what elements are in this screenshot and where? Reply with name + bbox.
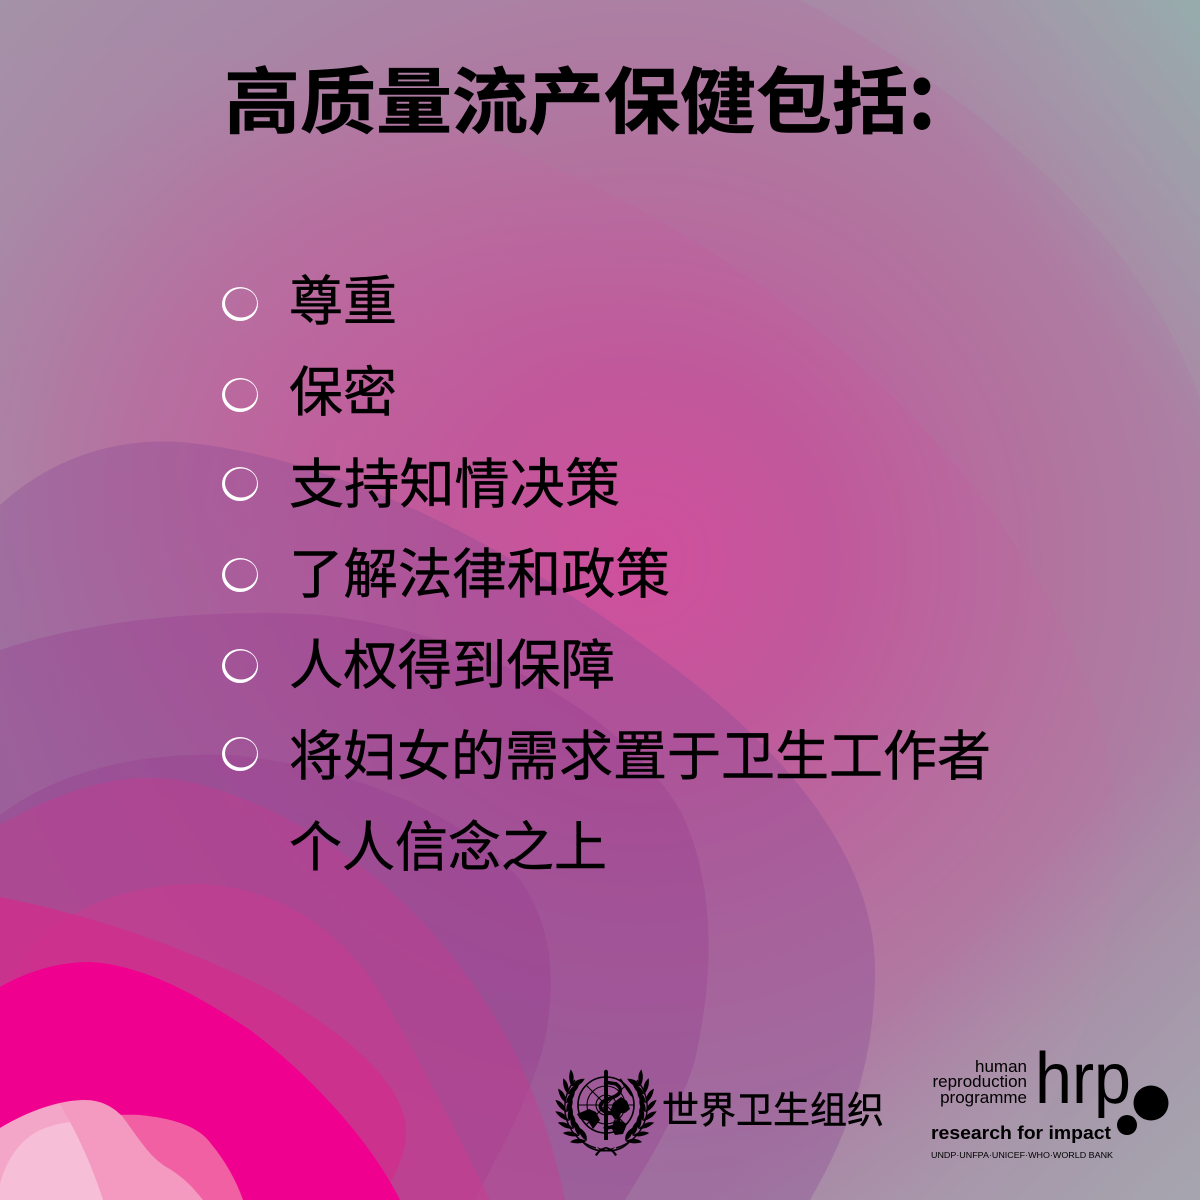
list item 3: 支持知情决策 bbox=[289, 455, 620, 515]
programme name bbox=[932, 1057, 1027, 1107]
list item 1: 尊重 bbox=[289, 272, 397, 332]
programme name: programme bbox=[940, 1088, 1027, 1107]
programme name: reproduction bbox=[932, 1072, 1027, 1091]
tagline: research for impact bbox=[931, 1123, 1111, 1143]
list item 6 bbox=[222, 727, 991, 878]
programme name: human bbox=[975, 1057, 1027, 1076]
title: : bbox=[907, 22, 937, 156]
list item 2: 保密 bbox=[289, 363, 397, 423]
list item 6: 个人信念之上 bbox=[289, 818, 607, 878]
hrp letters: hrp bbox=[1035, 1039, 1131, 1119]
list item 6: 将妇女的需求置于卫生工作者 bbox=[289, 727, 991, 787]
checklist bbox=[222, 272, 991, 878]
HRP logo bbox=[931, 1039, 1168, 1160]
partners: UNDP·UNFPA·UNICEF·WHO·WORLD BANK bbox=[931, 1151, 1114, 1160]
list item 4: 了解法律和政策 bbox=[289, 545, 670, 605]
list item 1 bbox=[222, 272, 397, 332]
decorative blobs bottom left bbox=[0, 442, 875, 1200]
dots bbox=[1134, 1086, 1168, 1120]
title bbox=[224, 22, 937, 156]
WHO name: 世界卫生组织 bbox=[662, 1090, 884, 1131]
list item 5: 人权得到保障 bbox=[289, 636, 615, 696]
title: 高质量流产保健包括 bbox=[224, 62, 908, 143]
list item 2 bbox=[222, 363, 397, 423]
icon: WHO emblem bbox=[555, 1069, 657, 1156]
